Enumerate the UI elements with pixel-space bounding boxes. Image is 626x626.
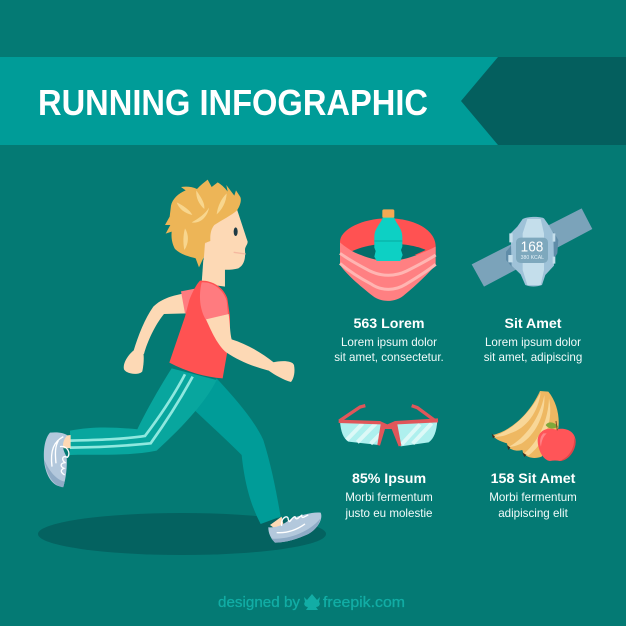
back hand	[124, 351, 144, 374]
stat: 563 Lorem	[334, 316, 444, 364]
stat: 158 Sit Amet: Morbi fermentum	[489, 491, 577, 504]
stat: Sit Amet: Lorem ipsum dolor	[485, 336, 581, 349]
title banner	[0, 57, 626, 145]
stat: 158 Sit Amet: 158 Sit Amet	[491, 471, 576, 487]
icon: sunglasses	[339, 406, 438, 446]
back arm	[133, 293, 187, 354]
stat: 85% Ipsum	[344, 471, 433, 520]
belt front	[340, 242, 436, 301]
stat: Sit Amet	[484, 316, 582, 364]
stat: 85% Ipsum: Morbi fermentum	[345, 491, 433, 504]
banana tips	[492, 434, 526, 457]
ground shadow	[38, 513, 326, 555]
neck	[202, 260, 225, 287]
stat: 85% Ipsum: 85% Ipsum	[352, 471, 426, 487]
front arm	[206, 314, 274, 371]
face	[203, 208, 248, 270]
footer credit: designed by	[218, 595, 301, 611]
rear leg	[70, 368, 217, 455]
apple leaf	[546, 422, 558, 429]
stat: 158 Sit Amet	[489, 471, 577, 520]
watch screen	[516, 238, 548, 263]
rear ankle	[62, 435, 71, 448]
watch side shade	[506, 232, 558, 267]
front ankle	[270, 517, 284, 529]
watch buttons	[508, 233, 555, 264]
apple	[538, 429, 576, 461]
watch kcal: 380 KCAL	[521, 255, 544, 261]
apple stem	[556, 421, 557, 430]
rear shoe	[44, 432, 69, 487]
eye	[234, 227, 238, 236]
watch readout: 168	[521, 240, 543, 256]
watch body	[511, 217, 554, 286]
apple shade	[560, 435, 576, 461]
stat: 563 Lorem: Lorem ipsum dolor	[341, 336, 437, 349]
icon: bananas and apple	[492, 391, 576, 461]
title: RUNNING INFOGRAPHIC	[38, 82, 428, 123]
runner illustration	[44, 260, 321, 543]
watch inner panel	[523, 219, 544, 285]
icon: sports watch	[472, 208, 592, 287]
stat: Sit Amet: sit amet, adipiscing	[484, 351, 582, 364]
stat: Sit Amet: Sit Amet	[504, 316, 562, 332]
belt stripes	[340, 253, 436, 289]
apple highlight	[540, 433, 547, 447]
stat: 563 Lorem: 563 Lorem	[354, 316, 424, 332]
bottle	[374, 209, 403, 261]
bananas highlight	[494, 392, 550, 456]
glasses frame	[339, 418, 438, 446]
stat: 563 Lorem: sit amet, consectetur.	[334, 351, 444, 364]
lenses	[340, 421, 382, 445]
icon: bottle belt	[340, 209, 436, 301]
bananas shade	[492, 391, 559, 458]
footer credit: freepik.com	[323, 595, 405, 611]
front leg	[195, 378, 281, 524]
mouth	[234, 252, 246, 254]
watch strap	[472, 208, 592, 287]
shirt	[169, 281, 230, 378]
belt inner opening	[351, 244, 426, 262]
front hand	[269, 361, 294, 382]
icon: freepik logo	[304, 594, 320, 610]
lens glare	[347, 423, 432, 444]
belt back	[340, 218, 436, 255]
hair	[165, 180, 241, 267]
stat: 85% Ipsum: justo eu molestie	[344, 507, 432, 520]
ear	[193, 227, 211, 247]
front sleeve	[200, 282, 228, 320]
leg stripes	[70, 374, 193, 448]
temple arms	[339, 406, 437, 422]
stat: 158 Sit Amet: adipiscing elit	[498, 507, 569, 520]
back sleeve	[181, 289, 195, 313]
hair highlights	[177, 190, 227, 250]
front shoe	[268, 512, 321, 543]
head and hair	[165, 180, 248, 270]
footer credit	[218, 594, 405, 611]
